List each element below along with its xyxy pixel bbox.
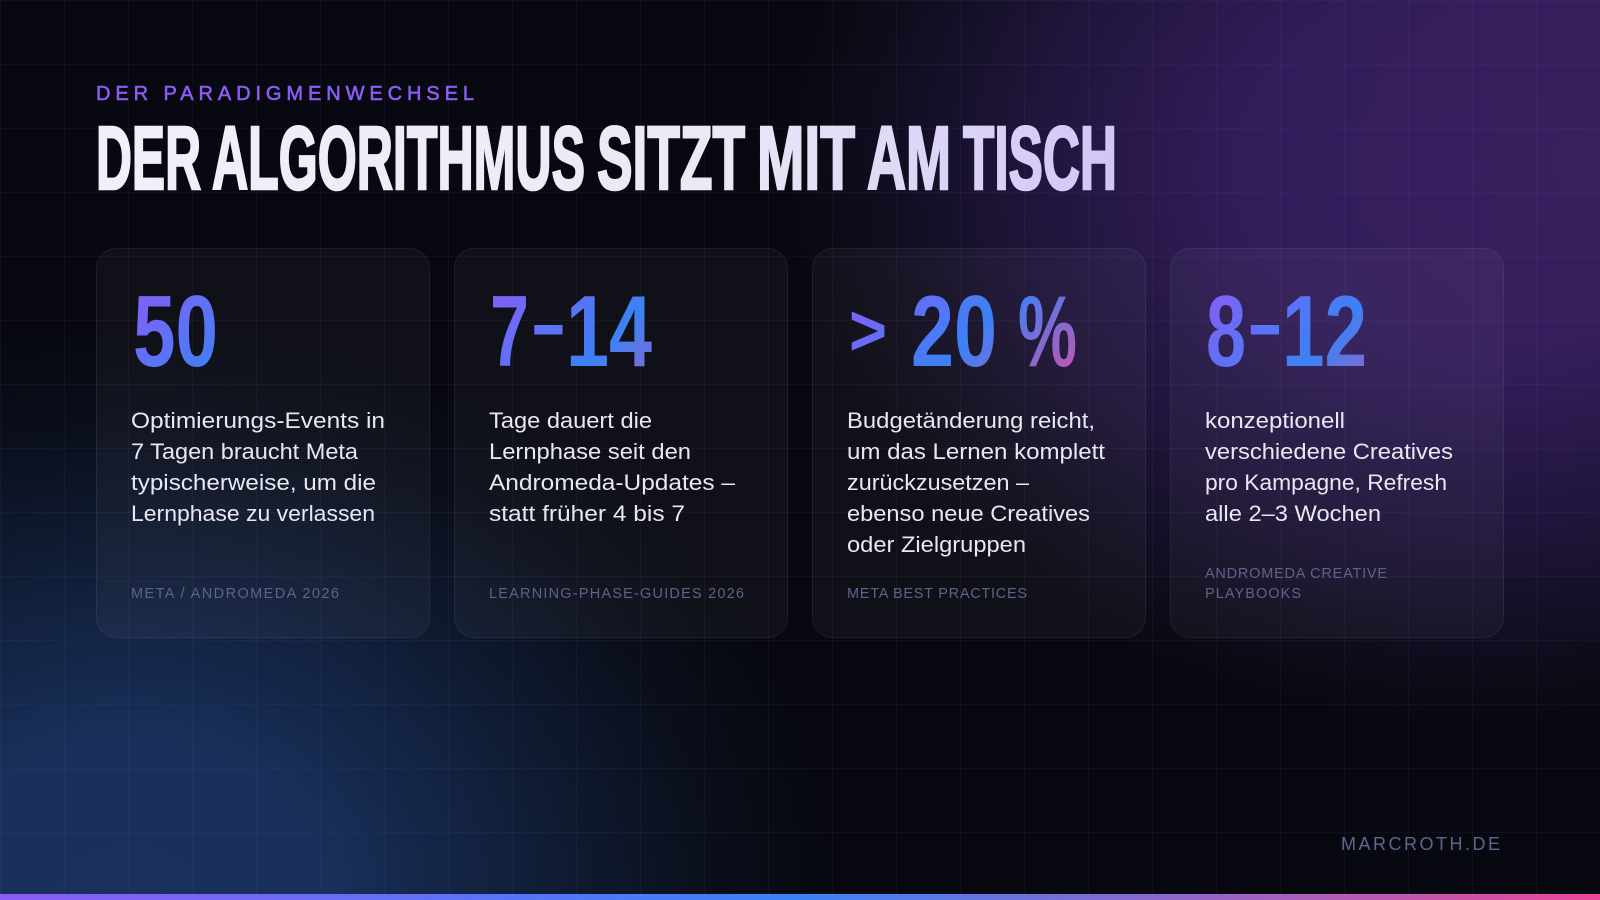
stat: 7-14: 7 [490,276,529,388]
title: AM [867,109,951,209]
description: um das Lernen komplett [847,439,1106,464]
description: Budgetänderung reicht, [847,408,1095,433]
description: ebenso neue Creatives [847,501,1090,526]
panel: card > 20 % [812,248,1146,638]
panel: card 8-12 [1170,248,1504,638]
title: MIT [757,109,855,209]
description: Lernphase zu verlassen [131,501,375,526]
stat: 7-14: 14 [566,276,652,388]
source: META BEST PRACTICES [847,586,1027,602]
title: SITZT [597,109,745,209]
title: DER [96,109,201,209]
description: Optimierungs-Events in [131,408,385,433]
stat: 8-12: - [1246,278,1284,368]
description [131,408,385,526]
stat: 50: 50 [133,276,218,388]
panel: card 7-14 [454,248,788,638]
description: zurückzusetzen – [847,470,1030,495]
stat: 7-14 [490,276,652,388]
stat: > 20 %: % [1018,276,1077,388]
source: META / ANDROMEDA 2026 [131,586,339,602]
description: pro Kampagne, Refresh [1205,470,1447,495]
panel: card 50 [96,248,430,638]
source: LEARNING-PHASE-GUIDES 2026 [489,586,744,602]
description: konzeptionell [1205,408,1345,433]
description [1205,408,1453,526]
description: Lernphase seit den [489,439,691,464]
stat: 8-12: 12 [1282,276,1367,388]
description: statt früher 4 bis 7 [489,501,685,526]
title [96,109,1117,209]
description: oder Zielgruppen [847,532,1026,557]
source: PLAYBOOKS [1205,586,1301,602]
description: verschiedene Creatives [1205,439,1453,464]
stat: > 20 %: > [849,291,887,371]
description: Andromeda-Updates – [489,470,736,495]
title: ALGORITHMUS [212,109,585,209]
footer brand: MARCROTH.DE [1341,834,1500,854]
stat: 8-12: 8 [1206,276,1246,388]
description: Tage dauert die [489,408,652,433]
stat: > 20 %: 20 [911,276,997,388]
description: 7 Tagen braucht Meta [131,439,359,464]
source: ANDROMEDA CREATIVE [1205,566,1387,582]
description [489,408,736,526]
stat: > 20 % [849,276,1077,388]
source [1205,566,1387,602]
description: alle 2–3 Wochen [1205,501,1381,526]
description: typischerweise, um die [131,470,376,495]
eyebrow: DER PARADIGMENWECHSEL [96,83,474,105]
stat: 8-12 [1206,276,1367,388]
stat: 7-14: - [530,278,567,368]
title: TISCH [963,109,1117,209]
bottom gradient bar [0,894,1600,900]
description [847,408,1106,557]
